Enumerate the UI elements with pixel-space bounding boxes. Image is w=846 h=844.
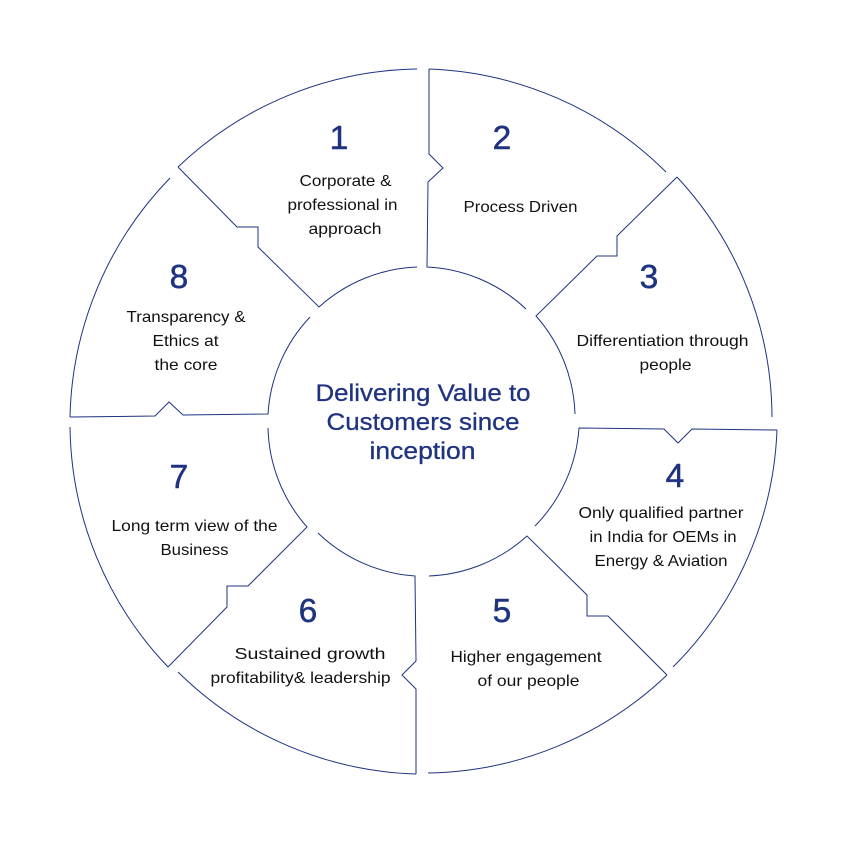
text: segment 6: profitability& leadership <box>210 670 391 687</box>
number 7: 7 <box>170 459 188 496</box>
text: segment 5: Higher engagement <box>450 649 602 666</box>
text: segment 4 <box>578 505 744 570</box>
text: segment 5 <box>450 649 602 690</box>
text: segment 1: approach <box>308 221 382 238</box>
text: segment 7 <box>112 518 278 559</box>
text: segment 4: in India for OEMs in <box>590 529 736 546</box>
number 2: 2 <box>493 120 511 157</box>
title: center text: Delivering Value to <box>316 380 530 407</box>
panel: segment 1 <box>178 69 417 307</box>
panel: segment 8 <box>70 178 310 417</box>
panel: segment 4 <box>535 428 777 667</box>
text: segment 3: people <box>640 357 692 374</box>
text: segment 3 <box>576 333 748 374</box>
panel: segment 2 <box>427 69 666 309</box>
number 8: 8 <box>170 259 188 296</box>
text: segment 8: Ethics at <box>152 333 219 350</box>
number 4: 4 <box>666 458 684 495</box>
panel: segment 6 <box>178 533 416 774</box>
title: center text: Customers since <box>326 409 520 436</box>
text: segment 4: Energy & Aviation <box>594 553 728 570</box>
panel: segment 7 <box>70 427 307 667</box>
number 6: 6 <box>299 593 317 630</box>
text: segment 5: of our people <box>478 673 580 690</box>
number 1: 1 <box>330 120 348 157</box>
text: segment 6 <box>210 646 391 687</box>
text: segment 7: Business <box>160 542 228 559</box>
panel: segment 5 <box>428 536 667 773</box>
text: segment 4: Only qualified partner <box>578 505 744 522</box>
text: segment 8: Transparency & <box>126 309 246 326</box>
text: segment 2: Process Driven <box>464 199 578 216</box>
text: segment 8: the core <box>154 357 218 374</box>
title: center text: inception <box>370 438 476 465</box>
text: segment 1 <box>288 173 398 238</box>
text: segment 1: Corporate & <box>300 173 392 190</box>
text: segment 8 <box>126 309 246 374</box>
number 3: 3 <box>640 259 658 296</box>
text: segment 1: professional in <box>288 197 398 214</box>
text: segment 6: Sustained growth <box>234 646 386 663</box>
number 5: 5 <box>493 593 511 630</box>
panel: segment 3 <box>536 177 772 417</box>
text: segment 7: Long term view of the <box>112 518 278 535</box>
text: segment 3: Differentiation through <box>576 333 748 350</box>
title: center text <box>316 380 530 465</box>
